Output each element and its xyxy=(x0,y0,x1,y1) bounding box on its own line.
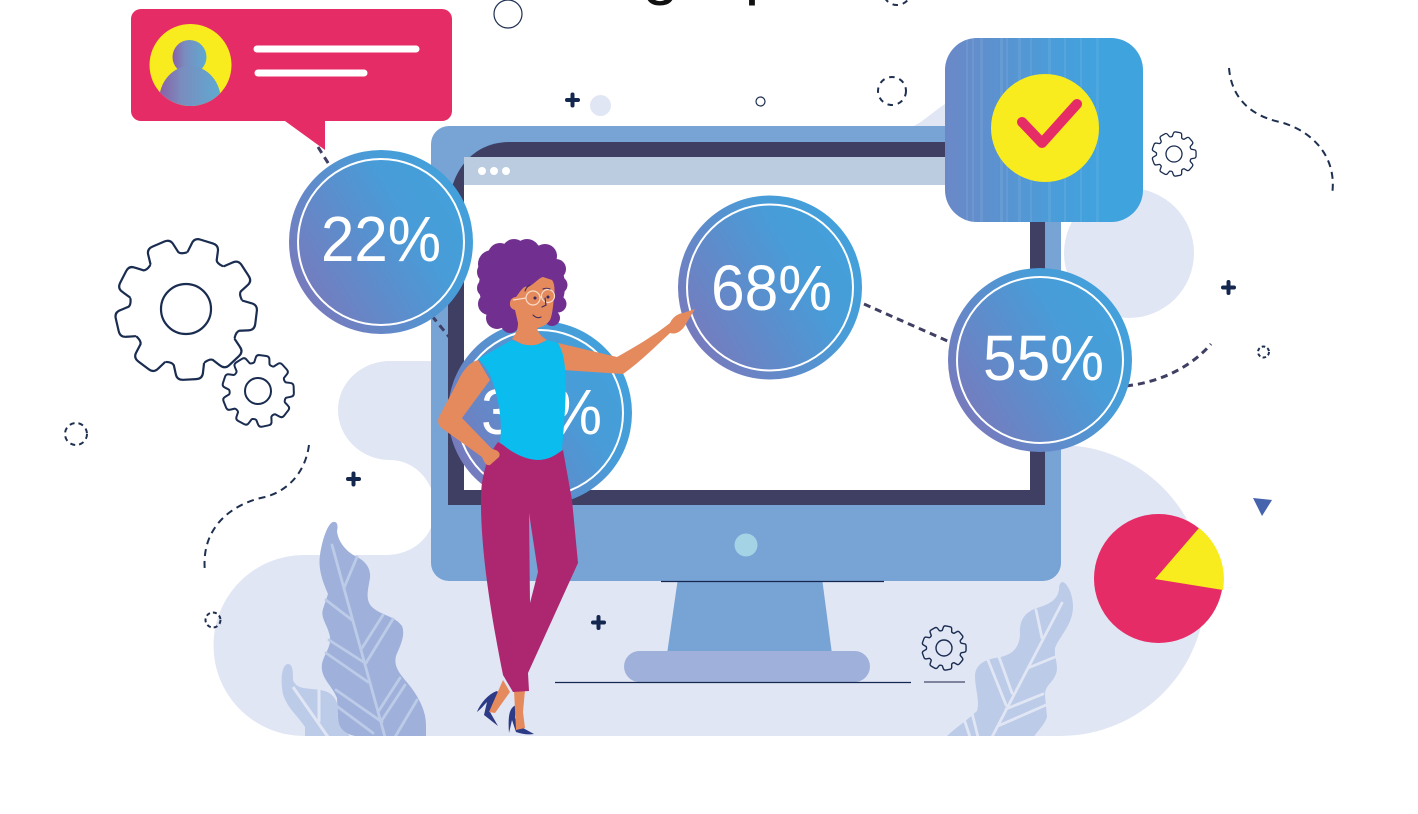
stat circle 68%: 68% xyxy=(711,252,832,324)
monitor xyxy=(431,126,1061,682)
power button xyxy=(734,534,758,556)
right leaf xyxy=(945,582,1073,738)
neck and face xyxy=(510,277,554,348)
top xyxy=(478,340,566,460)
plus signs xyxy=(348,94,1234,628)
card texture xyxy=(966,38,1099,222)
left arm xyxy=(438,360,500,465)
decorative circles xyxy=(65,0,1269,628)
stat circle 55% xyxy=(948,268,1132,452)
stat circle 55%: 55% xyxy=(983,322,1104,394)
stat circle 22% xyxy=(289,150,473,334)
stat circle 68% xyxy=(678,196,862,380)
icon: bottom gear xyxy=(921,625,966,671)
stat circle 35%: 35% xyxy=(481,376,602,448)
check card xyxy=(945,38,1143,222)
speech bubble xyxy=(131,9,452,150)
monitor stand xyxy=(667,578,832,654)
facial features xyxy=(525,285,550,318)
monitor bezel xyxy=(448,142,1045,505)
trousers xyxy=(481,442,578,692)
gear icons xyxy=(104,131,1196,671)
stand base xyxy=(624,651,870,682)
right arm xyxy=(558,309,695,374)
triangle xyxy=(1253,498,1272,516)
icon: check mark xyxy=(991,74,1099,182)
small back leaf xyxy=(282,664,350,738)
avatar xyxy=(150,24,232,106)
dashed curves xyxy=(205,68,1333,572)
hair xyxy=(477,239,568,333)
stat circle 35% xyxy=(448,321,632,505)
bubble body xyxy=(131,9,452,150)
icon: medium gear xyxy=(219,353,295,429)
shoes xyxy=(477,691,534,734)
ankles xyxy=(489,680,525,730)
browser bar xyxy=(464,157,1030,185)
floor lines xyxy=(555,582,965,682)
pie chart xyxy=(1094,514,1224,643)
message lines xyxy=(257,49,416,73)
dashed connectors xyxy=(318,147,1211,386)
woman presenter xyxy=(438,239,695,734)
glasses xyxy=(513,290,554,305)
background blobs xyxy=(214,104,1206,736)
icon: large gear xyxy=(104,228,265,390)
monitor screen xyxy=(464,157,1030,490)
icon: top right gear xyxy=(1151,131,1196,177)
stat circle 22%: 22% xyxy=(321,203,441,275)
large leaf xyxy=(319,522,426,738)
monitor body xyxy=(431,126,1061,581)
